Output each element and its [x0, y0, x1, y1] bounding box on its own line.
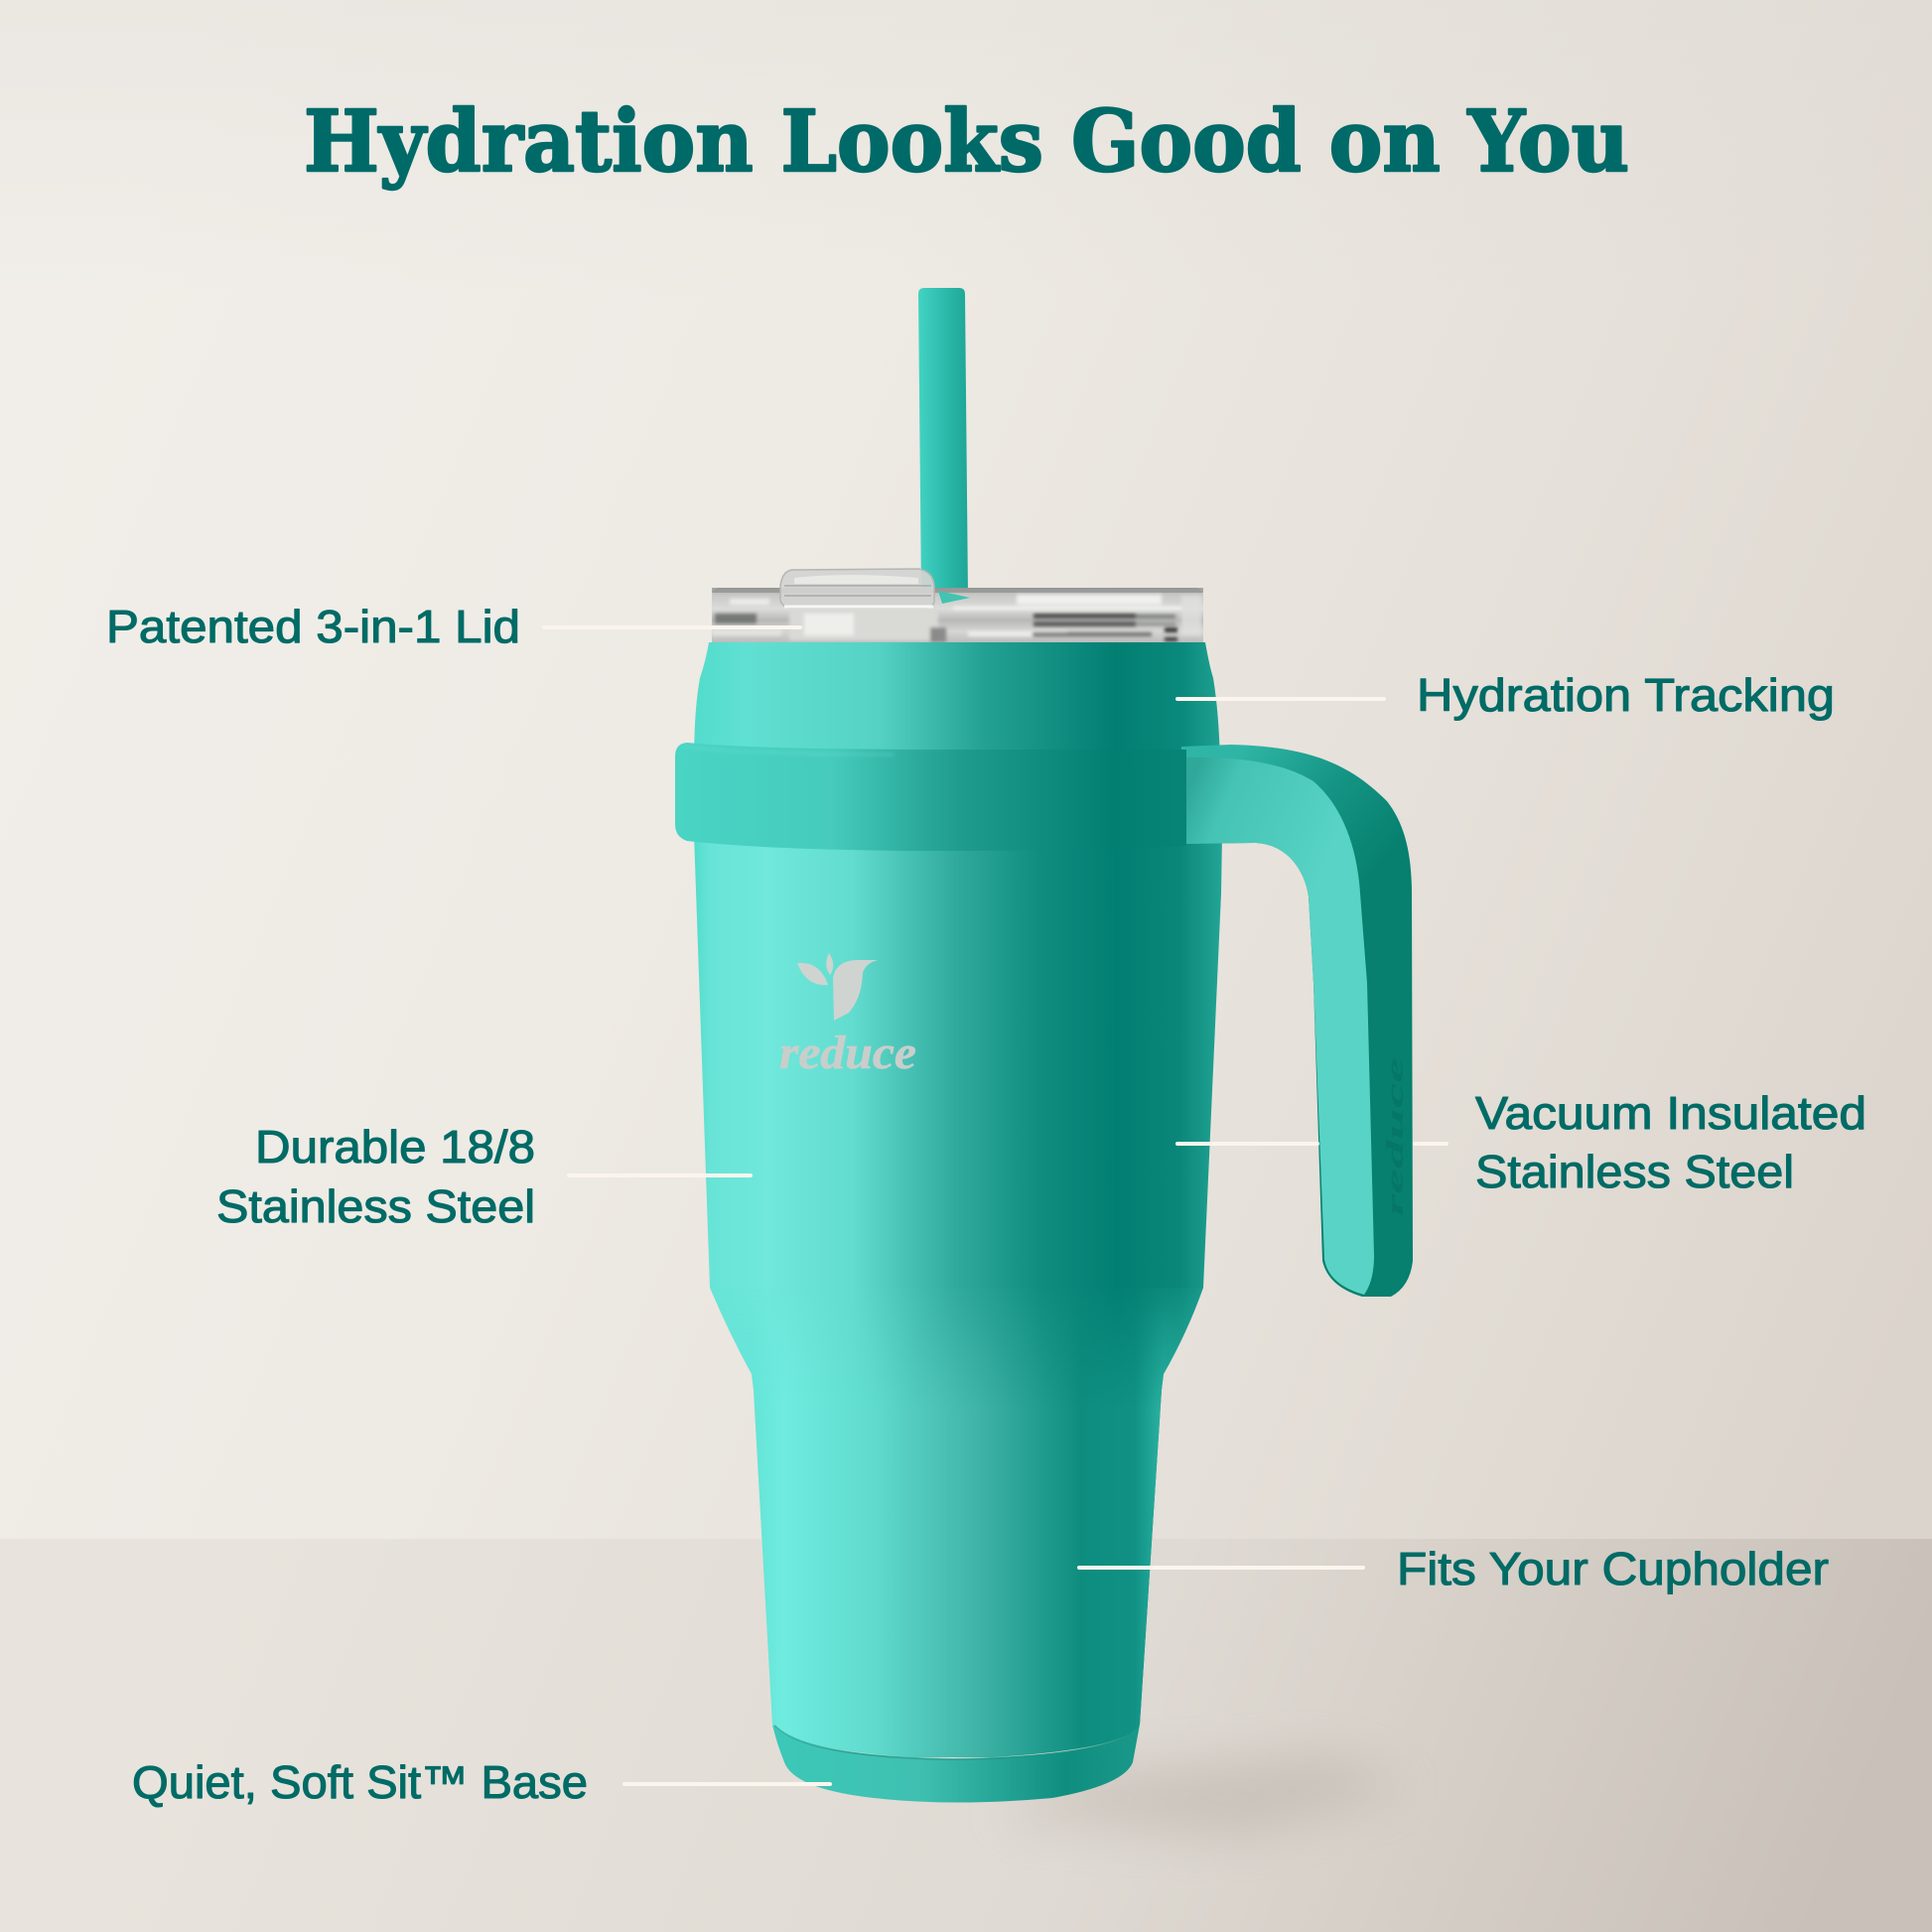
collar — [675, 743, 1186, 851]
handle — [1181, 745, 1413, 1297]
callout: durable steel: Stainless Steel — [216, 1180, 535, 1232]
callout: patented lid — [106, 601, 802, 652]
main body — [694, 834, 1222, 1725]
callout: cupholder — [1077, 1543, 1829, 1594]
straw — [918, 288, 968, 596]
handle embossed wordmark: reduce — [1383, 1056, 1409, 1216]
background wall — [0, 0, 1932, 1541]
upper neck — [694, 642, 1220, 764]
tumbler shadow — [993, 1757, 1410, 1837]
pointer line — [1175, 697, 1386, 701]
label: Quiet, Soft Sit™ Base — [132, 1756, 588, 1808]
lid slider button — [780, 569, 934, 608]
callout: durable steel — [216, 1121, 753, 1232]
background floor — [0, 1539, 1932, 1932]
label: Hydration Tracking — [1417, 669, 1835, 721]
label: Fits Your Cupholder — [1397, 1543, 1829, 1594]
logo — [779, 953, 916, 1079]
pointer line — [542, 625, 802, 629]
logo wordmark: reduce — [779, 1027, 916, 1079]
pointer line — [567, 1173, 753, 1177]
callout: soft sit base — [132, 1756, 832, 1808]
pointer line — [622, 1782, 832, 1786]
base — [772, 1725, 1140, 1803]
label: Vacuum Insulated — [1475, 1087, 1866, 1139]
callout: hydration tracking — [1175, 669, 1835, 721]
pointer line left — [1175, 1142, 1319, 1146]
label: Durable 18/8 — [255, 1121, 535, 1173]
lid — [712, 569, 1203, 642]
logo leaf mark — [797, 953, 878, 1021]
callout: vacuum insulated — [1175, 1087, 1866, 1197]
tumbler illustration — [675, 288, 1413, 1803]
straw window in lid — [938, 591, 970, 604]
title: Hydration Looks Good on You — [304, 92, 1629, 192]
label: Patented 3-in-1 Lid — [106, 601, 520, 652]
lower body — [710, 1288, 1203, 1759]
pointer line right — [1413, 1142, 1449, 1146]
pointer line — [1077, 1566, 1365, 1570]
callout: vacuum insulated: Stainless Steel — [1475, 1146, 1794, 1197]
